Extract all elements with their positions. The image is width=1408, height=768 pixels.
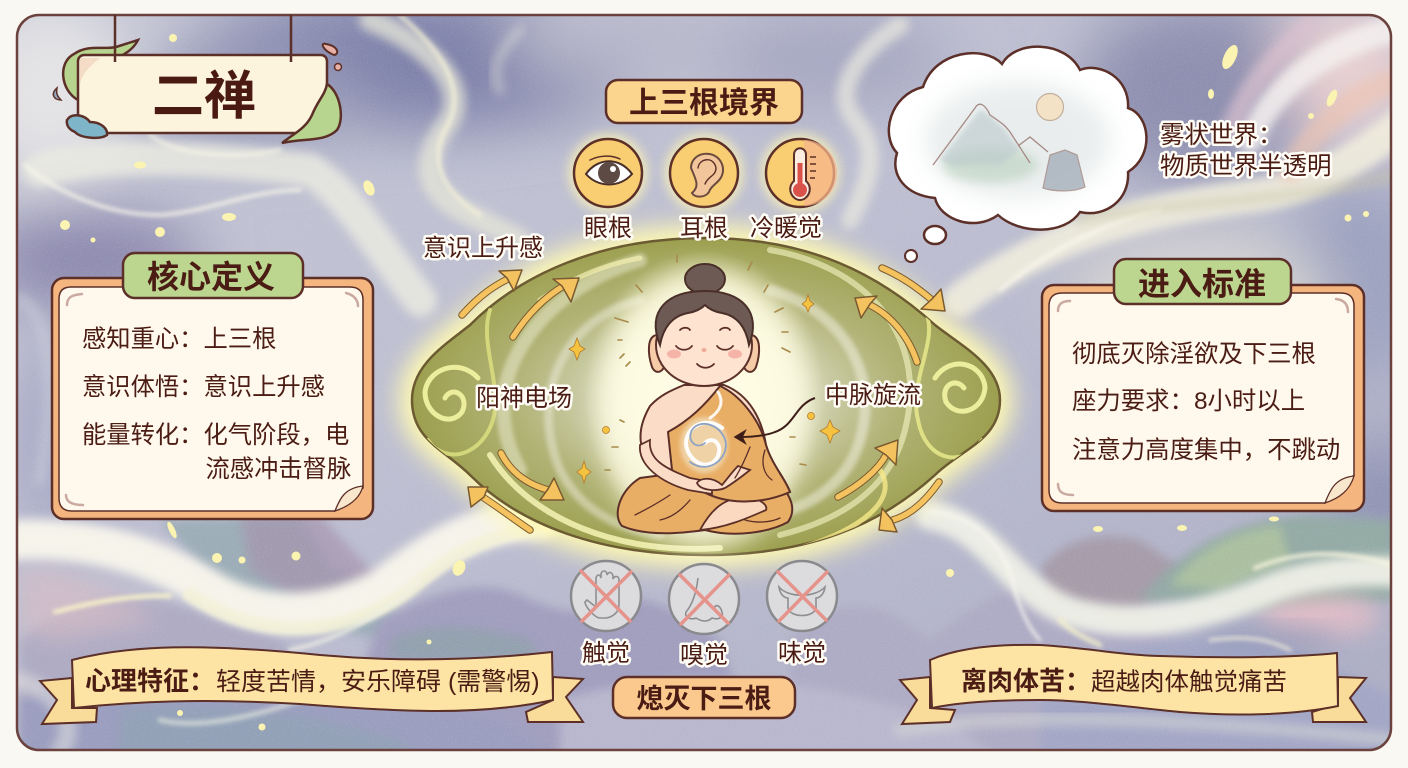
cloud caption: 物质世界半透明: [1160, 152, 1332, 180]
panel: core definition: 流感冲击督脉: [206, 456, 351, 483]
labels: upper roots: 耳根: [680, 215, 728, 242]
heading: upper three roots: 上三根境界: [629, 87, 779, 120]
labels: lower roots: 触觉: [582, 640, 630, 667]
heading: upper three roots: [606, 80, 802, 123]
pointer arrow: [735, 398, 815, 443]
field labels: 中脉旋流: [825, 382, 921, 409]
heading: entry standard: 进入标准: [1138, 266, 1266, 302]
panel: core definition: 能量转化：化气阶段，电: [82, 422, 349, 449]
aura rays and sparkles: [569, 295, 840, 483]
banner: psychological trait: 轻度苦情，安乐障碍 (需警惕): [216, 668, 540, 696]
labels: lower roots: 味觉: [778, 640, 826, 667]
ears: [649, 335, 759, 372]
panel: entry standard: 彻底灭除淫欲及下三根: [1072, 341, 1316, 368]
heading: core definition: 核心定义: [147, 259, 275, 295]
heading: extinguish lower roots: [613, 677, 795, 718]
icon: thermometer: [760, 133, 840, 213]
banner: psychological trait: [40, 647, 583, 724]
cloud caption: 雾状世界：: [1160, 121, 1282, 149]
thought cloud: misty world: [889, 47, 1146, 262]
banner: beyond the body: [900, 645, 1366, 724]
title sign: [53, 15, 342, 143]
banner: beyond the body: 超越肉体触觉痛苦: [1091, 668, 1287, 696]
labels: upper roots: [584, 215, 822, 242]
yang spirit field: [412, 238, 1000, 555]
icon: touch crossed out: [571, 561, 641, 631]
field labels: 意识上升感: [423, 235, 543, 262]
figure: meditating Buddha: [569, 255, 840, 550]
icon: eye: [568, 133, 648, 213]
panel: core definition: [52, 253, 373, 519]
distant mountains: [20, 600, 288, 699]
cloud caption: [1160, 121, 1332, 180]
panel: core definition: 意识体悟：意识上升感: [82, 374, 325, 401]
banner: psychological trait: 心理特征：: [85, 666, 215, 696]
field labels: [423, 235, 921, 412]
head: [656, 291, 753, 386]
labels: lower roots: [582, 640, 826, 669]
icon: smell crossed out: [669, 564, 739, 634]
icon: ear: [664, 133, 744, 213]
arrows: energy circulation: [462, 268, 945, 532]
field labels: 阳神电场: [476, 385, 572, 412]
panel: entry standard: [1042, 259, 1364, 511]
heading: entry standard: [1114, 259, 1291, 304]
labels: lower roots: 嗅觉: [680, 642, 728, 669]
hair bun: [685, 264, 725, 294]
title: 二禅: [152, 68, 256, 126]
heading: core definition: [123, 253, 303, 298]
labels: upper roots: 冷暖觉: [750, 215, 822, 242]
banner: beyond the body: 离肉体苦：: [961, 666, 1091, 696]
icon: taste crossed out: [767, 561, 837, 631]
panel: entry standard: 座力要求：8小时以上: [1072, 388, 1305, 415]
labels: upper roots: 眼根: [584, 215, 632, 242]
torso and robe: [640, 385, 790, 502]
panel: core definition: 感知重心：上三根: [82, 326, 276, 353]
panel: entry standard: 注意力高度集中，不跳动: [1072, 437, 1340, 464]
crossed legs: [618, 470, 792, 534]
heading: extinguish lower roots: 熄灭下三根: [636, 684, 772, 714]
swirl: central channel vortex: [680, 392, 728, 473]
